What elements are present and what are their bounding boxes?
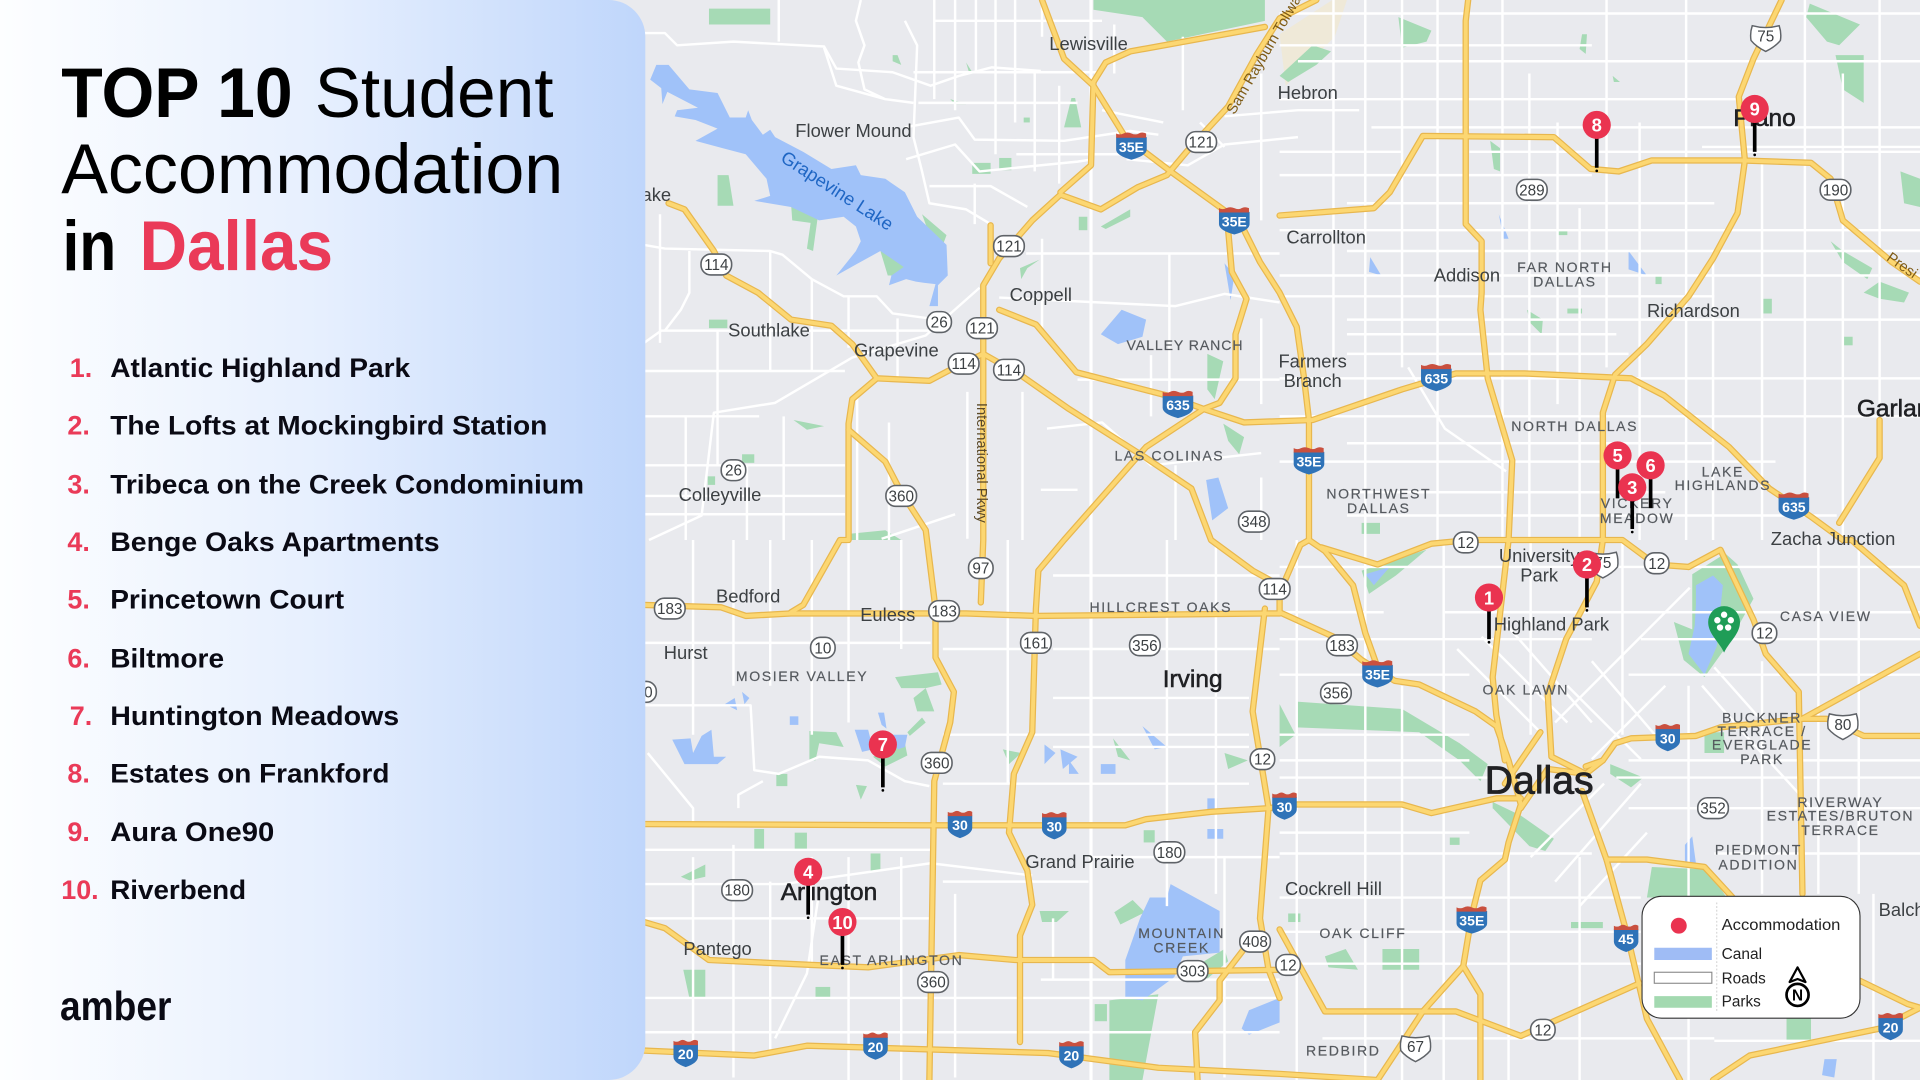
map: interstate shields: 30 xyxy=(1660,730,1676,746)
map: state route markers: 12 xyxy=(1280,957,1297,974)
map: place labels: Colleyville xyxy=(679,484,761,505)
map: interstate shields: 30 xyxy=(1046,818,1062,834)
map: interstate shields: 30 xyxy=(1277,799,1292,815)
ranked list of accommodations: 4. xyxy=(67,527,90,557)
icon: north arrow: N xyxy=(1792,987,1803,1004)
map: place labels: LAKE xyxy=(1702,463,1744,479)
ranked list of accommodations: Aura One90 xyxy=(110,817,274,847)
map: state route markers: 26 xyxy=(725,463,742,480)
map: interstate shields: 30 xyxy=(952,817,968,833)
ranked list of accommodations: 1. xyxy=(70,353,92,383)
map: place labels: Bedford xyxy=(716,585,780,606)
ranked list of accommodations: Tribeca on the Creek Condominium xyxy=(110,469,584,499)
ranked list of accommodations: 6. xyxy=(67,643,90,673)
map: place labels: TERRACE xyxy=(1801,822,1880,838)
map: state route markers: 114 xyxy=(997,362,1022,379)
map: place labels: Hurst xyxy=(664,642,708,663)
title: Accommodation xyxy=(61,130,563,208)
map: place labels: FAR NORTH xyxy=(1517,259,1613,275)
ranked list of accommodations: The Lofts at Mockingbird Station xyxy=(110,411,547,441)
map: place labels: OAK LAWN xyxy=(1482,681,1569,697)
map: place labels: ADDITION xyxy=(1718,856,1798,872)
logo: amber: amber xyxy=(60,983,172,1029)
map: state route markers: 67 xyxy=(1407,1039,1424,1056)
map: state route markers: 10 xyxy=(814,640,831,657)
map: place labels: Carrollton xyxy=(1286,227,1366,248)
map: place labels: University xyxy=(1499,545,1580,566)
map: state route markers: 97 xyxy=(972,561,989,578)
map: place labels: Southlake xyxy=(728,320,810,341)
map pins: numbered accommodation locations: 8 xyxy=(1592,115,1602,136)
ranked list of accommodations: Estates on Frankford xyxy=(110,758,389,788)
ranked list of accommodations: 2. xyxy=(67,411,90,441)
map: state route markers: 360 xyxy=(920,975,946,992)
map: tan land area xyxy=(1280,0,1347,86)
map: place labels: PARK xyxy=(1740,751,1784,767)
map: place labels: PIEDMONT xyxy=(1715,842,1802,858)
south west and centre grid xyxy=(644,643,1280,1038)
map: place labels: Grapevine xyxy=(854,339,939,360)
map: place labels: Highland Park xyxy=(1494,614,1610,635)
map: state route markers: 289 xyxy=(1519,182,1545,199)
map: place labels: Cockrell Hill xyxy=(1285,878,1382,899)
north east grid xyxy=(1280,13,1920,516)
map: state route markers: 121 xyxy=(1188,135,1214,152)
map: place labels: Grand Prairie xyxy=(1025,851,1135,872)
ranked list of accommodations xyxy=(61,353,584,905)
map: state route markers: 348 xyxy=(1241,514,1267,531)
map: interstate shields: 20 xyxy=(868,1039,884,1055)
ranked list of accommodations: Riverbend xyxy=(110,875,246,905)
map: place labels: Branch xyxy=(1284,370,1342,391)
legend: roads: Roads xyxy=(1722,970,1766,987)
map: place labels: ESTATES/BRUTON xyxy=(1767,807,1914,823)
ranked list of accommodations: 10. xyxy=(61,875,99,905)
map: state route markers: 360 xyxy=(888,488,914,505)
map: place labels: TERRACE / xyxy=(1717,723,1807,739)
map: place labels: Arlington xyxy=(781,879,877,906)
title xyxy=(61,54,563,285)
map: state route markers: 75 xyxy=(1594,555,1611,572)
map: interstate shields: 35E xyxy=(1222,214,1247,230)
title: Student xyxy=(315,54,553,132)
map: place labels: ake xyxy=(642,184,671,205)
ranked list of accommodations: 7. xyxy=(70,701,92,731)
map: interstate shields: 20 xyxy=(1883,1019,1899,1035)
map: place labels xyxy=(642,0,1920,1059)
map: state route markers: 114 xyxy=(704,257,729,274)
map: state route markers: 12 xyxy=(1534,1022,1551,1039)
map: state route markers: 12 xyxy=(1648,556,1665,573)
map: place labels: Irving xyxy=(1163,666,1223,693)
map: interstate shields: 635 xyxy=(1166,397,1190,413)
map: state route markers: 180 xyxy=(1157,845,1182,862)
map: place labels: HIGHLANDS xyxy=(1675,477,1771,493)
map pins: numbered accommodation locations: 5 xyxy=(1612,445,1623,466)
map: local roads xyxy=(644,0,1920,1080)
map: state route markers: 161 xyxy=(1023,635,1049,652)
map: interstate shields: 635 xyxy=(1782,499,1806,515)
map: highways xyxy=(644,0,1920,1080)
map: interstate shields: 20 xyxy=(1064,1047,1079,1063)
map pins: numbered accommodation locations: 7 xyxy=(878,734,888,755)
map: place labels: HILLCREST OAKS xyxy=(1090,599,1232,615)
map: place labels: MOUNTAIN xyxy=(1138,925,1225,941)
map: state route markers: 121 xyxy=(969,321,995,338)
title: TOP 10 xyxy=(61,54,293,132)
legend: roads xyxy=(1654,970,1766,987)
map: state route markers: 75 xyxy=(1757,29,1774,46)
map: interstate shields: 635 xyxy=(1425,370,1448,386)
legend: accommodation: Accommodation xyxy=(1722,917,1840,934)
map: interstate shields xyxy=(673,133,1903,1068)
map: state route markers: 12 xyxy=(1457,535,1474,552)
ranked list of accommodations: Huntington Meadows xyxy=(110,701,399,731)
map: place labels: NORTHWEST xyxy=(1326,485,1431,501)
map: state route markers: 352 xyxy=(1700,801,1726,818)
map: place labels: Pantego xyxy=(683,938,752,959)
map: state route markers xyxy=(632,26,1858,1062)
map: place labels: Park xyxy=(1520,565,1559,586)
map: state route markers: 360 xyxy=(924,755,950,772)
ranked list of accommodations: Princetown Court xyxy=(110,585,344,615)
map: place labels: MEADOW xyxy=(1600,510,1674,526)
map: place labels: VALLEY RANCH xyxy=(1127,337,1244,353)
map: interstate shields: 35E xyxy=(1459,913,1484,929)
map pins: numbered accommodation locations: 6 xyxy=(1646,455,1656,476)
map: place labels: Coppell xyxy=(1010,284,1072,305)
map: state route markers: 180 xyxy=(724,883,750,900)
map: state route markers: 183 xyxy=(1329,638,1355,655)
map: place labels: Farmers xyxy=(1278,350,1347,371)
map: interstate shields: 20 xyxy=(678,1046,694,1062)
panel: left sidebar xyxy=(0,0,645,1080)
map: state route markers: 121 xyxy=(996,239,1022,256)
map pins: numbered accommodation locations xyxy=(794,95,1769,969)
map pins: numbered accommodation locations: 2 xyxy=(1582,554,1592,575)
map: place labels: REDBIRD xyxy=(1306,1043,1381,1059)
map: place labels: EAST ARLINGTON xyxy=(820,952,963,968)
map: place labels: International Pkwy xyxy=(973,403,989,524)
map: place labels: DALLAS xyxy=(1533,274,1597,290)
ranked list of accommodations: Biltmore xyxy=(110,643,224,673)
map: place labels: Zacha Junction xyxy=(1771,528,1895,549)
title: in xyxy=(62,207,116,285)
map: place labels: Dallas xyxy=(1485,759,1594,802)
map: place labels: VICKERY xyxy=(1601,495,1673,511)
legend: parks: Parks xyxy=(1722,994,1761,1011)
map: state route markers: 356 xyxy=(1323,686,1349,703)
map: place labels: Lewisville xyxy=(1049,33,1128,54)
map: interstate shields: 35E xyxy=(1365,667,1390,683)
ranked list of accommodations: 3. xyxy=(67,469,90,499)
map: place labels: CASA VIEW xyxy=(1780,608,1872,624)
map: place labels: OAK CLIFF xyxy=(1319,925,1406,941)
map: place labels: Hebron xyxy=(1278,82,1338,103)
ranked list of accommodations: 5. xyxy=(67,585,90,615)
map: interstate shields: 35E xyxy=(1119,139,1144,155)
map pins: numbered accommodation locations: 3 xyxy=(1627,477,1637,498)
map: place labels: Richardson xyxy=(1647,300,1740,321)
ranked list of accommodations: Benge Oaks Apartments xyxy=(110,527,440,557)
map: place labels: Addison xyxy=(1434,265,1500,286)
map: place labels: LAS COLINAS xyxy=(1114,447,1224,463)
map: place labels: Presi xyxy=(1883,250,1920,282)
ranked list of accommodations: Atlantic Highland Park xyxy=(110,353,410,383)
map: place labels: NORTH DALLAS xyxy=(1511,418,1638,434)
map: state route markers: 183 xyxy=(657,601,683,618)
map: place labels: Euless xyxy=(860,604,915,625)
map pins: numbered accommodation locations: 4 xyxy=(803,862,814,883)
map: state route markers: 12 xyxy=(1756,626,1773,643)
map: state route markers: 114 xyxy=(1262,581,1287,598)
map: state route markers: 12 xyxy=(1254,752,1271,769)
map pins: numbered accommodation locations: 1 xyxy=(1484,587,1494,608)
map: state route markers: 80 xyxy=(1834,717,1851,734)
icon: north arrow xyxy=(1787,967,1809,1006)
map: place labels: Flower Mound xyxy=(795,120,912,141)
map: state route markers: 114 xyxy=(951,356,976,373)
ranked list of accommodations: 9. xyxy=(67,817,90,847)
map: state route markers: 10 xyxy=(636,684,653,701)
map: place labels: Grapevine Lake xyxy=(777,146,897,235)
legend xyxy=(1642,896,1860,1018)
title: Dallas xyxy=(140,207,333,285)
map: interstate shields: 45 xyxy=(1618,931,1634,947)
map: state route markers: 190 xyxy=(1823,182,1848,199)
map pins: numbered accommodation locations: 10 xyxy=(832,912,853,933)
map: state route markers: 183 xyxy=(931,604,957,621)
map: interstate shields: 35E xyxy=(1296,454,1322,470)
map: state route markers: 303 xyxy=(1180,964,1205,981)
south east grid xyxy=(1280,567,1920,1041)
legend: canal: Canal xyxy=(1722,946,1762,963)
map: place labels: DALLAS xyxy=(1347,500,1411,516)
map: state route markers: 26 xyxy=(931,315,948,332)
map: place labels: CREEK xyxy=(1153,940,1210,956)
icon: green park marker xyxy=(1708,606,1740,653)
map: lakes xyxy=(650,65,1837,1078)
map: state route markers: 408 xyxy=(1242,934,1268,951)
map: place labels: MOSIER VALLEY xyxy=(736,668,868,684)
map: place labels: BUCKNER xyxy=(1722,709,1802,725)
map: place labels: EVERGLADE xyxy=(1712,736,1812,752)
map: parks xyxy=(681,0,1920,1080)
ranked list of accommodations: 8. xyxy=(67,758,90,788)
map: place labels: Plano xyxy=(1733,105,1796,132)
legend: parks xyxy=(1654,994,1761,1011)
legend: canal xyxy=(1654,946,1762,963)
map: state route markers: 356 xyxy=(1132,638,1158,655)
map: place labels: RIVERWAY xyxy=(1797,794,1883,810)
map pins: numbered accommodation locations: 9 xyxy=(1750,99,1760,120)
legend: accommodation xyxy=(1671,917,1840,934)
